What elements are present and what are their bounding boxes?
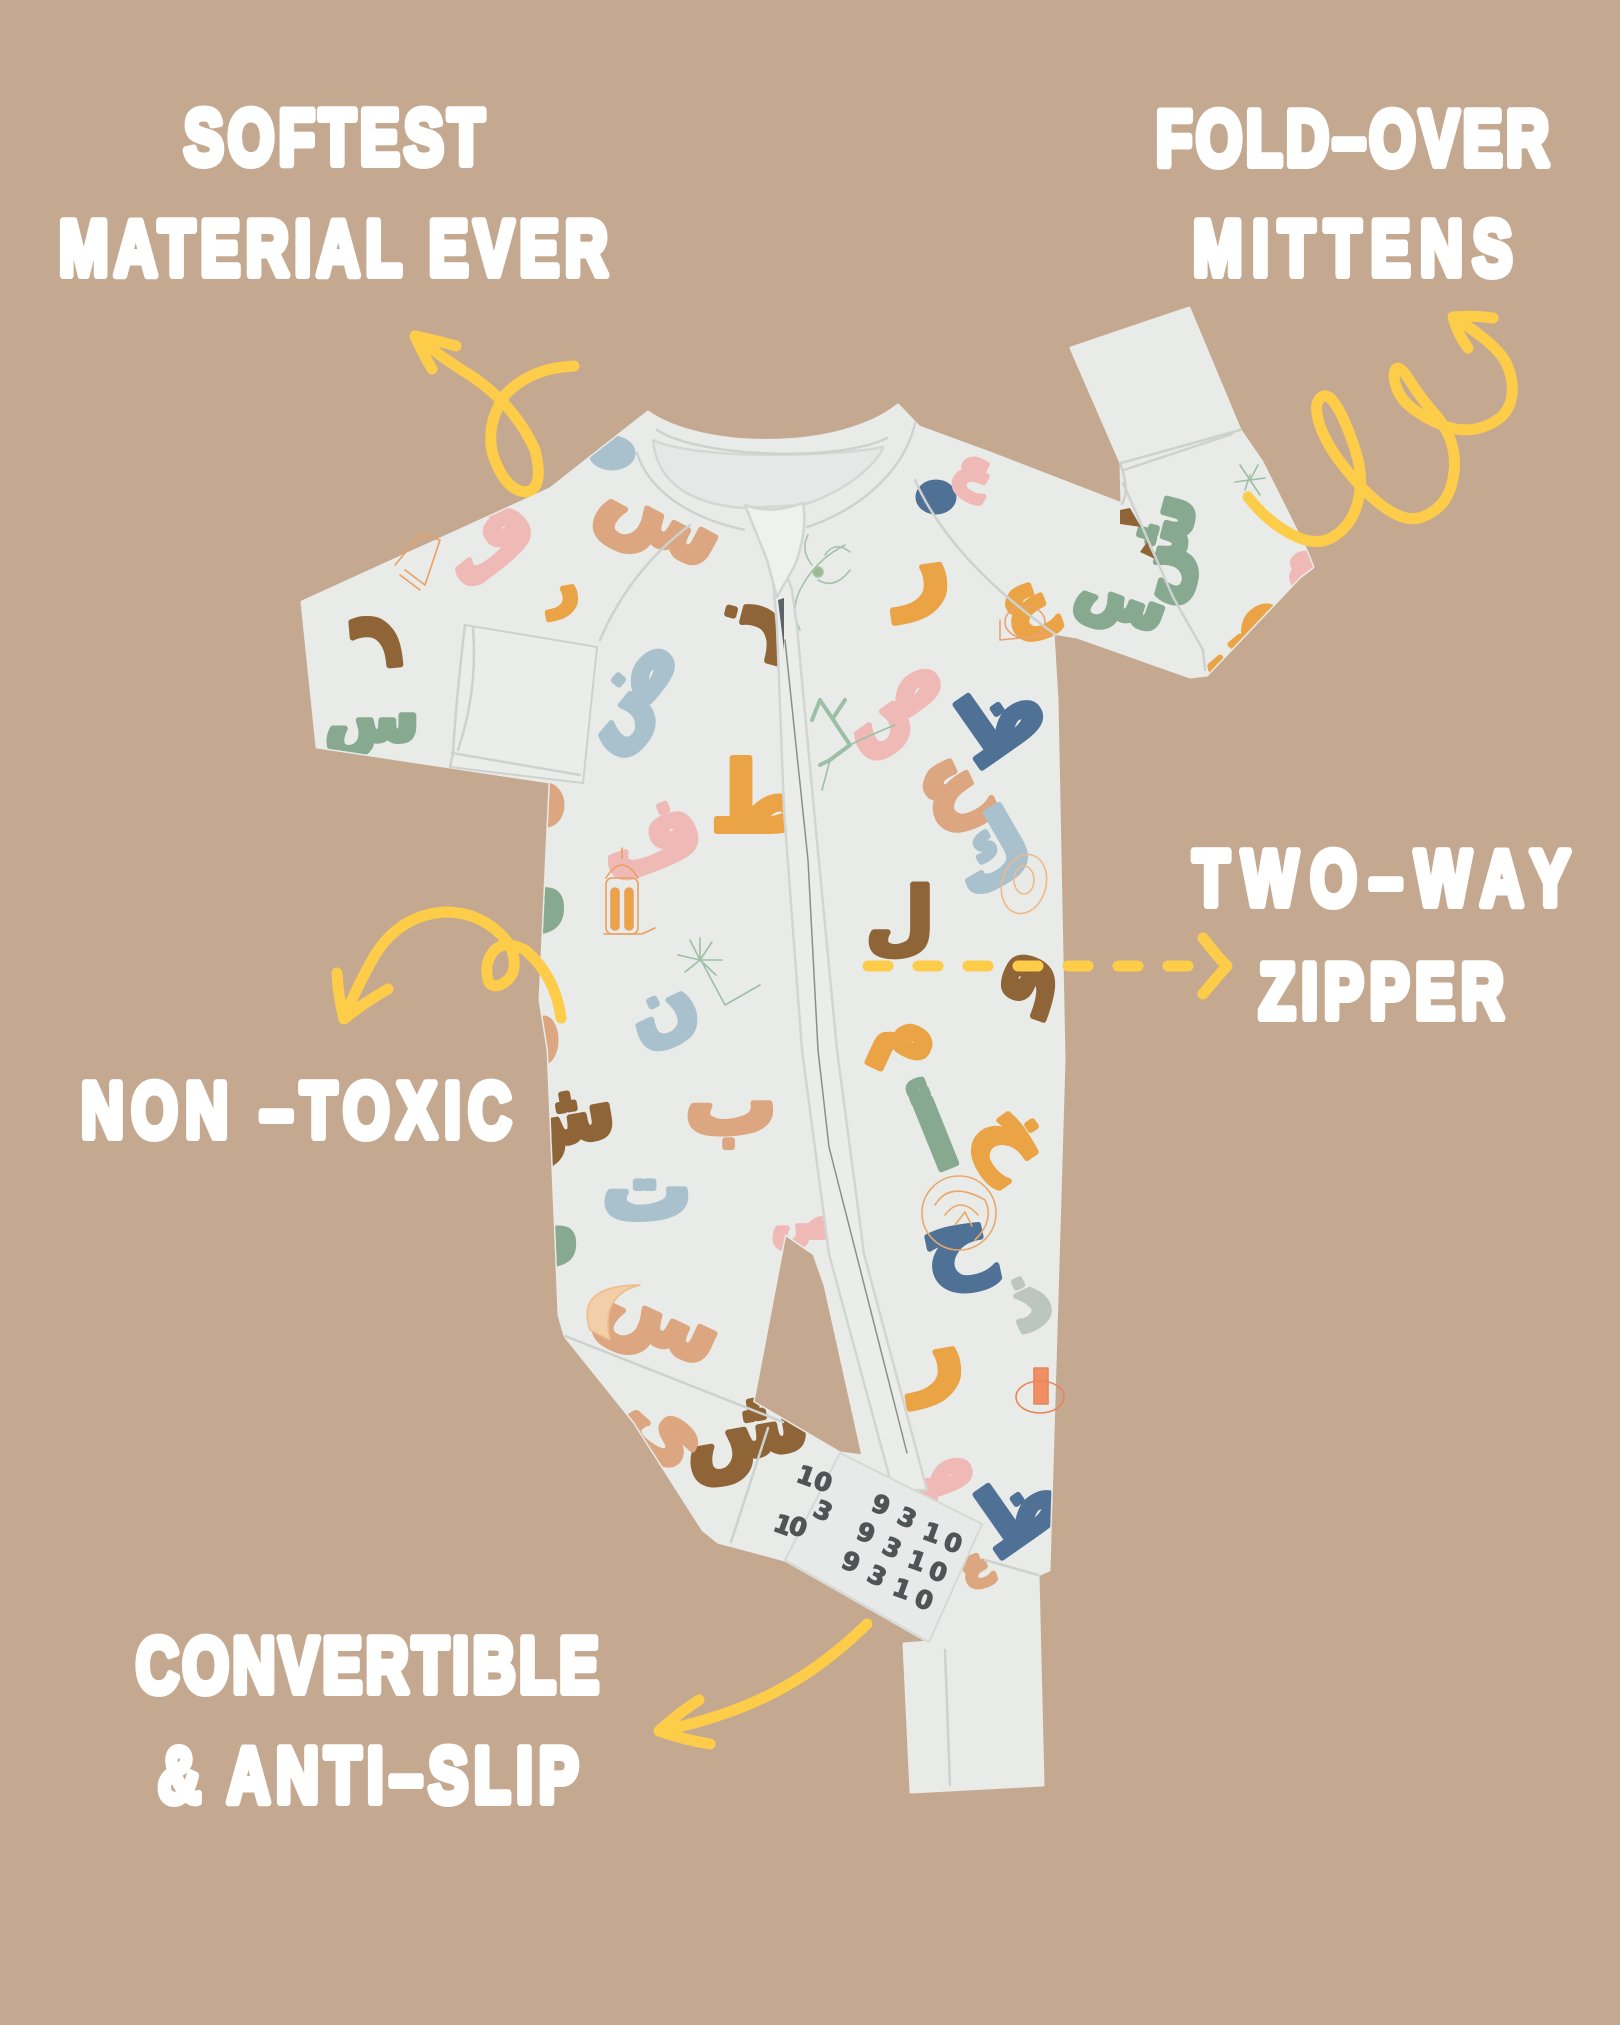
line motif: palm [678,938,760,1005]
label: two-way zipper: TWO–WAY [1193,834,1570,922]
alphabet pattern: ر [292,610,400,674]
alphabet pattern: ص [772,1191,840,1249]
arrow: non-toxic [337,912,561,1019]
label: two-way zipper [1193,834,1570,1035]
label: convertible and anti-slip: CONVERTIBLE [136,1621,599,1709]
foot cuffs and sole [565,1336,1038,1785]
zipper placket [745,503,927,1490]
alphabet pattern: ع [988,552,1063,647]
anti-slip grip numerals: 0 [785,1510,811,1544]
alphabet pattern: ع [946,435,1009,506]
alphabet pattern: ش [494,1059,622,1173]
romper garment [292,308,1322,1792]
label: non-toxic: NON –TOXIC [81,1066,511,1154]
label: fold-over mittens: FOLD–OVER [1156,94,1549,182]
anti-slip grip numerals: 0 [911,1583,937,1617]
alphabet pattern: س [1068,544,1180,648]
alphabet pattern: و [515,844,567,934]
alphabet pattern: خ [959,1083,1077,1191]
arrow: convertible [659,1624,867,1744]
alphabet pattern: ف [583,770,715,902]
line motif: round bread [995,849,1053,919]
line motif: lantern [604,848,655,934]
label: fold-over mittens [1156,94,1549,292]
dark zipper slit [778,598,784,650]
alphabet pattern: و [945,928,1065,1020]
alphabet pattern: ش [1097,481,1215,611]
anti-slip grip numerals: 3 [863,1559,891,1593]
line motif: plate [922,1176,996,1250]
alphabet pattern: ص [865,1416,985,1529]
raglan seams [600,480,1056,640]
alphabet pattern: ع [896,719,999,842]
anti-slip grip numerals: 0 [810,1465,836,1499]
line motif: mitten palm [1235,465,1265,495]
alphabet pattern: ع [1288,535,1322,589]
alphabet pattern: أ [900,1075,972,1193]
label: convertible and anti-slip: & ANTI–SLIP [158,1731,578,1819]
alphabet pattern: ن [609,949,711,1063]
left mitten fold [450,625,597,783]
alphabet pattern: ك [929,787,1051,917]
anti-slip grip numerals: 0 [925,1555,951,1589]
anti-slip grip numerals: 0 [940,1526,966,1560]
line motif: sleeve lantern [395,535,440,590]
alphabet pattern: ي [605,1361,731,1489]
label: fold-over mittens: MITTENS [1193,204,1512,292]
alphabet pattern: س [325,678,419,758]
anti-slip grip numerals: 1 [889,1572,915,1606]
label: softest material ever [59,93,608,292]
anti-slip grip numerals: 1 [904,1544,930,1578]
alphabet pattern: ش [673,1361,817,1489]
alphabet pattern: و [535,1191,578,1265]
alphabet pattern: ذ [986,1244,1066,1352]
alphabet pattern: ت [602,1136,692,1240]
anti-slip grip numerals: 1 [770,1508,796,1542]
anti-slip grip numerals: 9 [868,1488,894,1522]
line motif: cactus [812,700,895,790]
line motif: sleeve bread [1000,606,1050,640]
alphabet pattern: ر [537,551,582,619]
anti-slip grip numerals: 1 [793,1459,819,1493]
label: convertible and anti-slip [136,1621,599,1819]
alphabet pattern: ر [889,1282,971,1408]
anti-slip grip numerals: 3 [878,1531,906,1565]
line motif: olive branch [795,535,850,630]
garment body silhouette [302,308,1313,1792]
alphabet pattern: ح [910,1174,1001,1298]
line motif: pastry [587,1285,640,1340]
alphabet pattern: ل [866,873,934,963]
label: two-way zipper: ZIPPER [1259,947,1504,1035]
anti-slip grip numerals: 1 [919,1516,945,1550]
right mitten fold [1120,430,1240,670]
arrow: two-way zipper [868,938,1227,994]
alphabet pattern: ف [419,473,553,607]
alphabet pattern: م [862,971,960,1086]
anti-slip grip numerals: 9 [838,1545,864,1579]
alphabet pattern: ر [877,498,956,623]
collar [637,423,915,530]
zipper pull tab [745,503,804,597]
alphabet pattern: س [583,1237,743,1387]
arrow: softest material [415,336,574,492]
arrow: fold-over mittens [1248,316,1512,542]
brown sleeve fragments [1120,508,1155,559]
anti-slip grip numerals [770,1459,966,1617]
alphabet pattern: ز [678,584,791,664]
alphabet pattern [292,435,1322,1591]
alphabet pattern: ظ [950,1442,1084,1578]
line motif: tea glass [1016,1368,1064,1413]
alphabet pattern: ط [710,742,810,854]
anti-slip grip numerals: 3 [809,1494,837,1528]
alphabet pattern: ص [1168,565,1300,695]
alphabet pattern: ع [953,1538,996,1591]
anti-slip grip numerals: 9 [853,1516,879,1550]
anti-slip grip numerals: 3 [893,1501,921,1535]
alphabet pattern: ص [813,622,962,768]
alphabet pattern: س [584,436,746,590]
alphabet pattern: ض [543,607,701,767]
alphabet pattern: ظ [930,652,1064,788]
alphabet pattern: ب [685,1048,777,1156]
label: softest material ever: SOFTEST [184,93,484,181]
label: softest material ever: MATERIAL EVER [59,204,608,292]
